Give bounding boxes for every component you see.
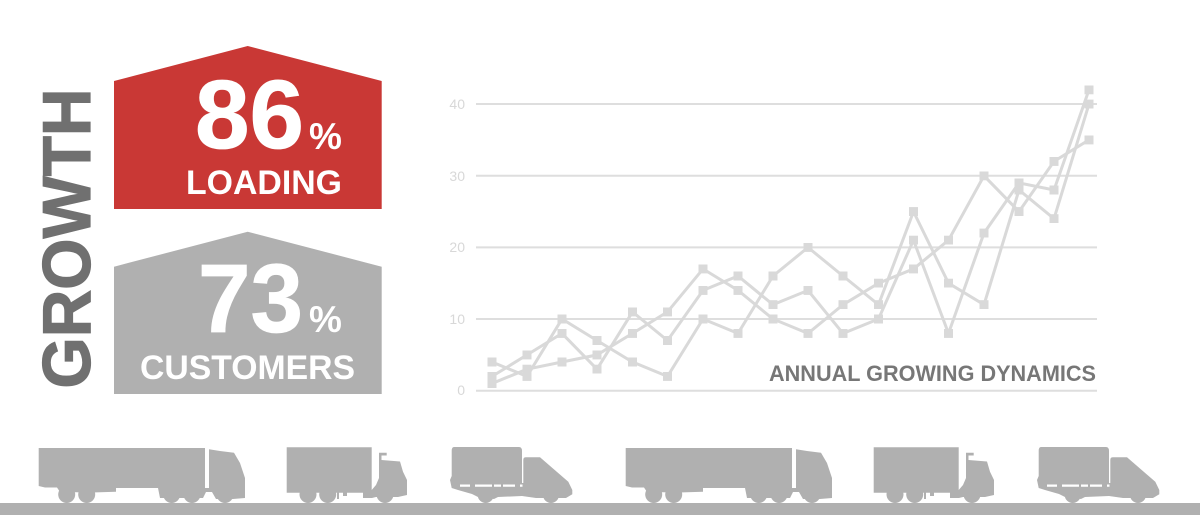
data series 2 <box>492 90 1089 376</box>
panel: loading <box>114 46 382 209</box>
ground strip <box>0 503 1200 515</box>
axis labels: 0 <box>457 382 465 398</box>
icon: tarp truck 6 <box>1037 447 1159 503</box>
icon: tarp truck 3 <box>450 447 572 503</box>
panel: customers <box>114 232 382 394</box>
data series 1 <box>492 104 1089 376</box>
icon: long truck 4 <box>626 448 832 503</box>
icon: box truck 5 <box>874 447 994 503</box>
panel: customers: 73 <box>198 244 303 353</box>
icon: box truck 2 <box>287 447 407 503</box>
axis labels: 20 <box>449 239 465 255</box>
heading: GROWTH: GROWTH <box>29 88 105 388</box>
axis labels: 40 <box>449 96 465 112</box>
panel: loading: 86 <box>195 60 304 169</box>
chart title: ANNUAL GROWING DYNAMICS <box>769 361 1096 386</box>
data series 3 <box>492 140 1089 384</box>
panel: customers: % <box>309 299 342 340</box>
panel: customers: CUSTOMERS <box>140 349 355 387</box>
icon: long truck 1 <box>39 448 245 503</box>
panel: loading: LOADING <box>186 164 342 202</box>
line chart: annual growing dynamics <box>449 90 1097 398</box>
panel: loading: % <box>309 116 342 157</box>
axis labels: 10 <box>449 311 465 327</box>
axis labels <box>449 96 465 398</box>
axis labels: 30 <box>449 168 465 184</box>
